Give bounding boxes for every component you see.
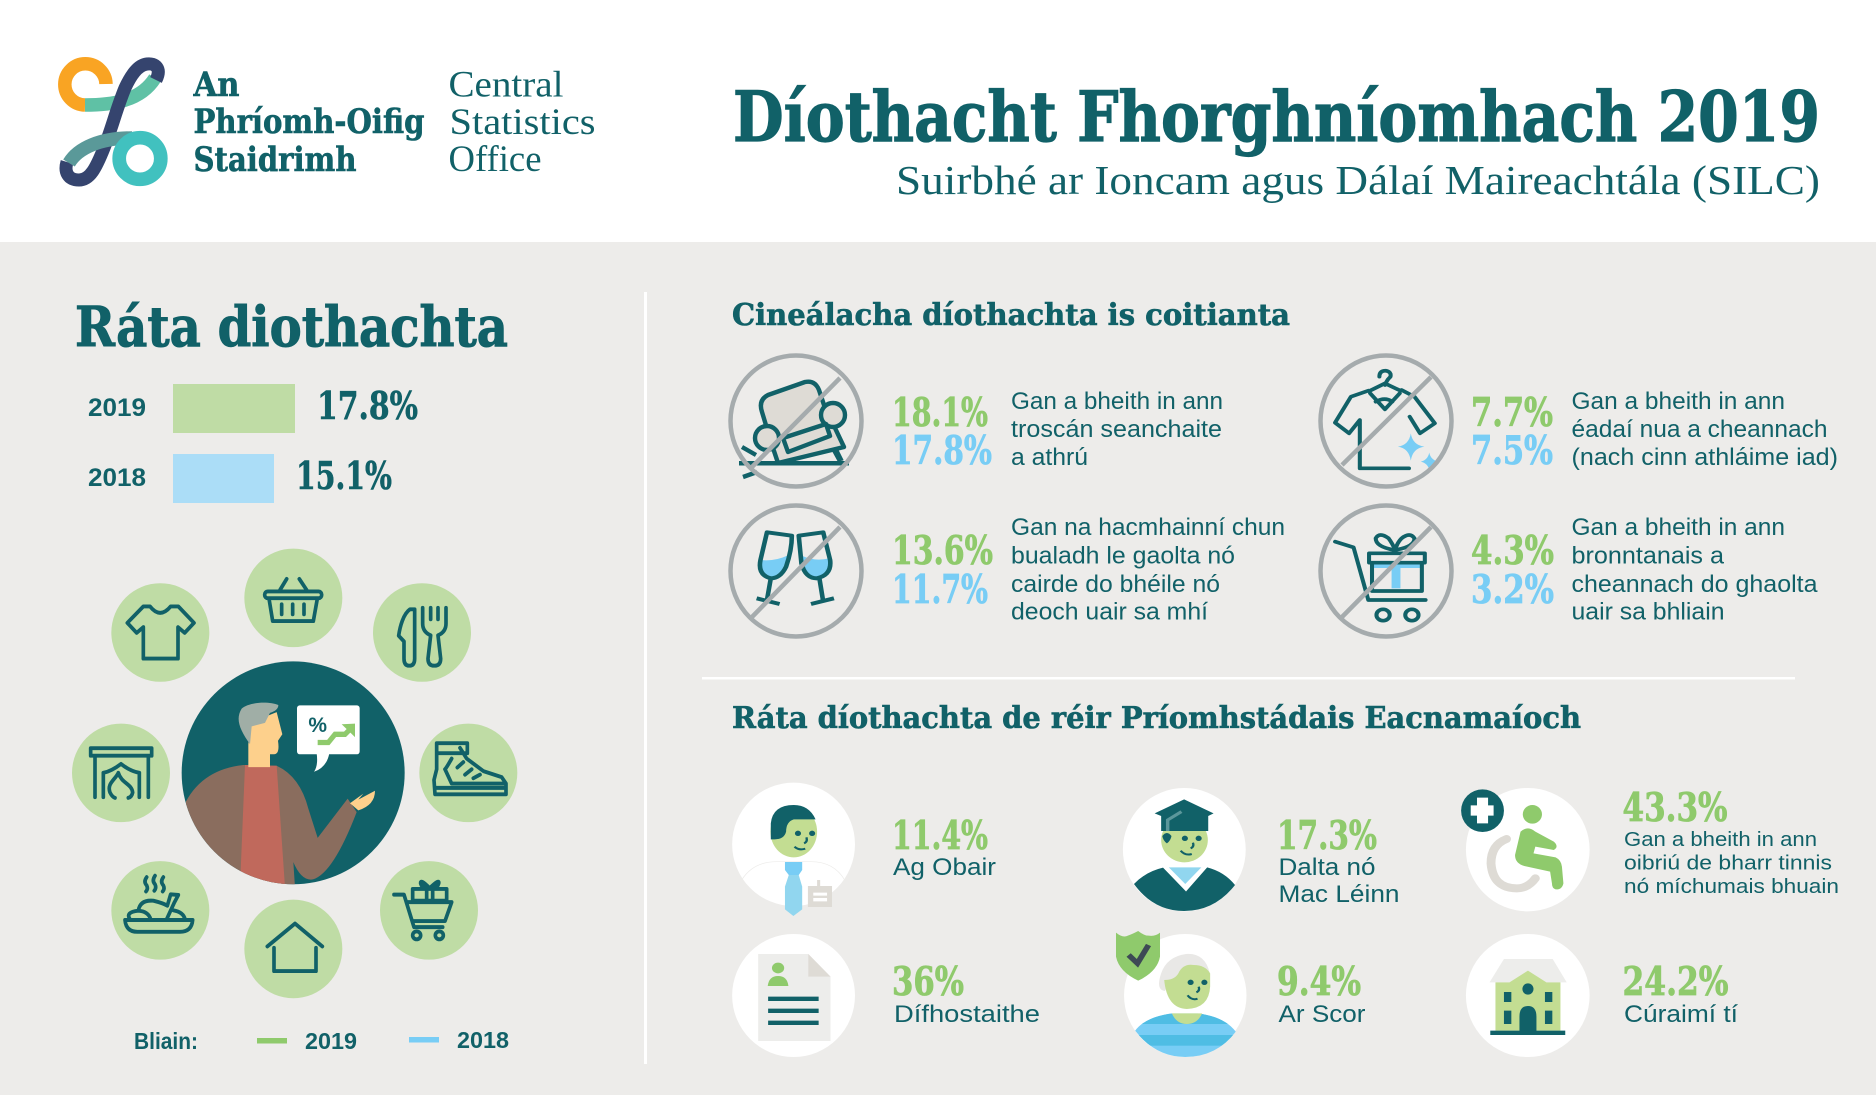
values: retired: 9.4% — [1277, 959, 1361, 1005]
text: social outing: deoch uair sa mhí — [1011, 598, 1208, 626]
values: at work: Ag Obair — [893, 854, 996, 881]
subtitle: Suirbhé ar Ioncam agus Dálaí Maireachtála (SILC) — [896, 157, 1820, 203]
illustration: man presenting a rising percentage — [182, 661, 405, 887]
icon: roast chicken — [111, 861, 209, 960]
text: new clothes: Gan a bheith in ann — [1572, 388, 1785, 415]
icon: house building — [1466, 934, 1590, 1057]
values: student: Mac Léinn — [1278, 881, 1400, 908]
text: furniture — [1011, 388, 1223, 471]
logo wordmark: Irish: Staidrimh — [194, 140, 356, 180]
text: new clothes: éadaí nua a cheannach — [1572, 416, 1828, 443]
values: unable to work: Gan a bheith in ann — [1624, 828, 1817, 851]
icon: shopping cart with gifts — [380, 861, 478, 960]
values: gifts — [1471, 528, 1554, 613]
icon: fireplace — [72, 724, 170, 822]
panel: poverty rate — [72, 294, 517, 1054]
bar chart: poverty rate by year: 2019 — [88, 394, 146, 422]
icon: crossed-out armchair — [730, 356, 862, 486]
icon: graduate — [1123, 788, 1246, 911]
values: unemployed: Dífhostaithe — [894, 1001, 1040, 1028]
text: furniture: troscán seanchaite — [1011, 416, 1222, 443]
legend: Bliain: — [134, 1028, 198, 1054]
text: gifts: bronntanais a — [1572, 542, 1724, 570]
legend — [134, 1027, 509, 1054]
logo: Central Statistics Office — [65, 64, 596, 180]
heading: poverty rate: Ráta diothachta — [75, 294, 508, 359]
values: furniture — [892, 390, 992, 474]
text: furniture: a athrú — [1011, 444, 1088, 471]
values: student — [1277, 813, 1400, 908]
icon: cutlery — [373, 583, 471, 682]
values: furniture: 17.8% — [892, 428, 992, 474]
text: new clothes — [1572, 388, 1838, 471]
values: gifts: 4.3% — [1471, 528, 1554, 574]
speech bubble with chart — [297, 705, 360, 772]
logo wordmark: English: Office — [448, 139, 542, 180]
values: new clothes: 7.7% — [1471, 390, 1553, 436]
heading: common deprivation: Cineálacha díothachta is coitianta — [732, 298, 1290, 333]
item: furniture — [730, 356, 1223, 486]
values: new clothes: 7.5% — [1471, 428, 1553, 474]
icon: wheelchair user with medical cross — [1461, 788, 1590, 911]
values: home duties: Cúraimí tí — [1624, 1001, 1738, 1028]
item: retired — [1116, 931, 1366, 1058]
values: student: Dalta nó — [1278, 854, 1376, 881]
values: unable to work — [1622, 785, 1839, 898]
panel: poverty rate by principal economic status — [732, 701, 1839, 1058]
item: social outing — [730, 506, 1285, 636]
values: unable to work: nó míchumais bhuain — [1624, 875, 1839, 898]
values: social outing: 11.7% — [892, 567, 988, 613]
icon: retired person with shield — [1116, 931, 1246, 1058]
item: unable to work — [1461, 785, 1839, 911]
icon: worker with tie — [732, 783, 855, 916]
values: student: 17.3% — [1277, 813, 1377, 859]
text: social outing: bualadh le gaolta nó — [1011, 542, 1235, 570]
legend: 2018 — [457, 1027, 509, 1053]
item: home duties — [1466, 934, 1738, 1057]
values: retired: Ar Scor — [1278, 1001, 1366, 1028]
icon wheel — [72, 549, 517, 998]
logo wordmark: English — [448, 64, 596, 180]
text: gifts: uair sa bhliain — [1572, 598, 1724, 626]
item: student — [1123, 788, 1400, 911]
text: furniture: Gan a bheith in ann — [1011, 388, 1223, 415]
heading: economic status: Ráta díothachta de réir Príomhstádais Eacnamaíoch — [732, 701, 1581, 736]
bar chart: poverty rate by year: 17.8% — [317, 383, 418, 428]
logo wordmark: Irish — [193, 65, 424, 180]
values: at work: 11.4% — [892, 813, 988, 859]
item: gifts — [1320, 506, 1818, 636]
text: new clothes: (nach cinn athláime iad) — [1572, 444, 1838, 471]
text: gifts: Gan a bheith in ann — [1572, 514, 1785, 541]
icon: house — [244, 900, 342, 998]
text: social outing: Gan na hacmhainní chun — [1011, 514, 1285, 541]
bar chart: poverty rate by year: 2018 — [88, 464, 146, 492]
icon: crossed-out cart with gift — [1320, 506, 1452, 636]
text: gifts: cheannach do ghaolta — [1572, 571, 1818, 598]
values: unemployed — [892, 959, 1040, 1028]
icon: crossed-out wine glasses — [730, 506, 862, 636]
values: unemployed: 36% — [892, 959, 964, 1005]
values: new clothes — [1471, 390, 1553, 474]
values: home duties: 24.2% — [1622, 959, 1728, 1005]
item: new clothes — [1320, 356, 1838, 486]
item: unemployed — [732, 934, 1040, 1057]
icon: boot — [419, 724, 517, 822]
icon: crossed-out shirt on hanger — [1320, 356, 1452, 486]
icon: basket — [244, 549, 342, 647]
panel: most common types of deprivation — [730, 298, 1838, 636]
values: at work — [892, 813, 996, 881]
legend: 2019 — [305, 1028, 357, 1054]
logo wordmark: English: Statistics — [450, 102, 596, 143]
item: at work — [732, 783, 996, 916]
text: social outing — [1011, 514, 1285, 626]
logo wordmark: English: Central — [448, 64, 564, 106]
values: social outing: 13.6% — [892, 528, 993, 574]
bar chart: poverty rate by year: 15.1% — [296, 453, 392, 498]
text: social outing: cairde do bhéile nó — [1011, 571, 1220, 598]
values: gifts: 3.2% — [1471, 567, 1554, 613]
logo wordmark: Irish: Phríomh-Oifig — [194, 102, 424, 142]
speech bubble with chart: % — [308, 714, 327, 737]
values: furniture: 18.1% — [892, 390, 988, 436]
values: unable to work: oibriú de bharr tinnis — [1624, 852, 1832, 874]
logo wordmark: Irish: An — [193, 65, 240, 105]
text: gifts — [1572, 514, 1818, 626]
values: home duties — [1622, 959, 1738, 1028]
bar chart: poverty rate by year — [88, 383, 418, 503]
icon: t-shirt — [111, 583, 209, 682]
icon: CV document — [732, 934, 855, 1057]
values: unable to work: 43.3% — [1622, 785, 1728, 831]
values: retired — [1277, 959, 1366, 1028]
values: social outing — [892, 528, 993, 613]
icon: logo mark — [65, 64, 161, 180]
